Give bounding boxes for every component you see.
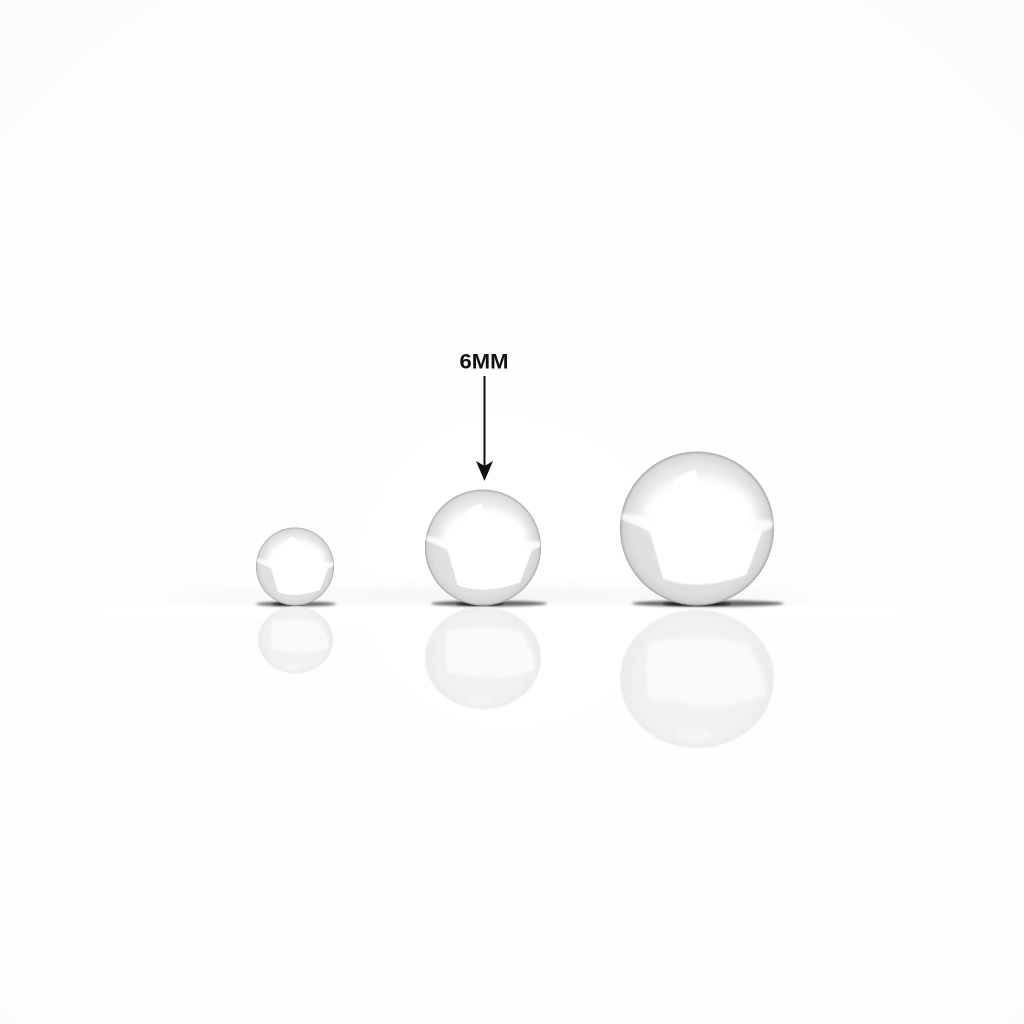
small sphere shadow: [256, 602, 336, 606]
medium sphere: [425, 490, 541, 606]
small sphere reflection: [258, 606, 333, 674]
large sphere: [620, 452, 774, 606]
medium sphere shadow: [431, 601, 547, 606]
arrow pointing to medium sphere: [476, 376, 493, 481]
ground haze: [100, 589, 900, 622]
size label: 6MM: 6MM: [460, 350, 508, 374]
medium sphere reflection: [425, 607, 541, 709]
small sphere: [256, 528, 334, 606]
large sphere reflection: [620, 610, 774, 748]
large sphere shadow: [632, 600, 784, 607]
